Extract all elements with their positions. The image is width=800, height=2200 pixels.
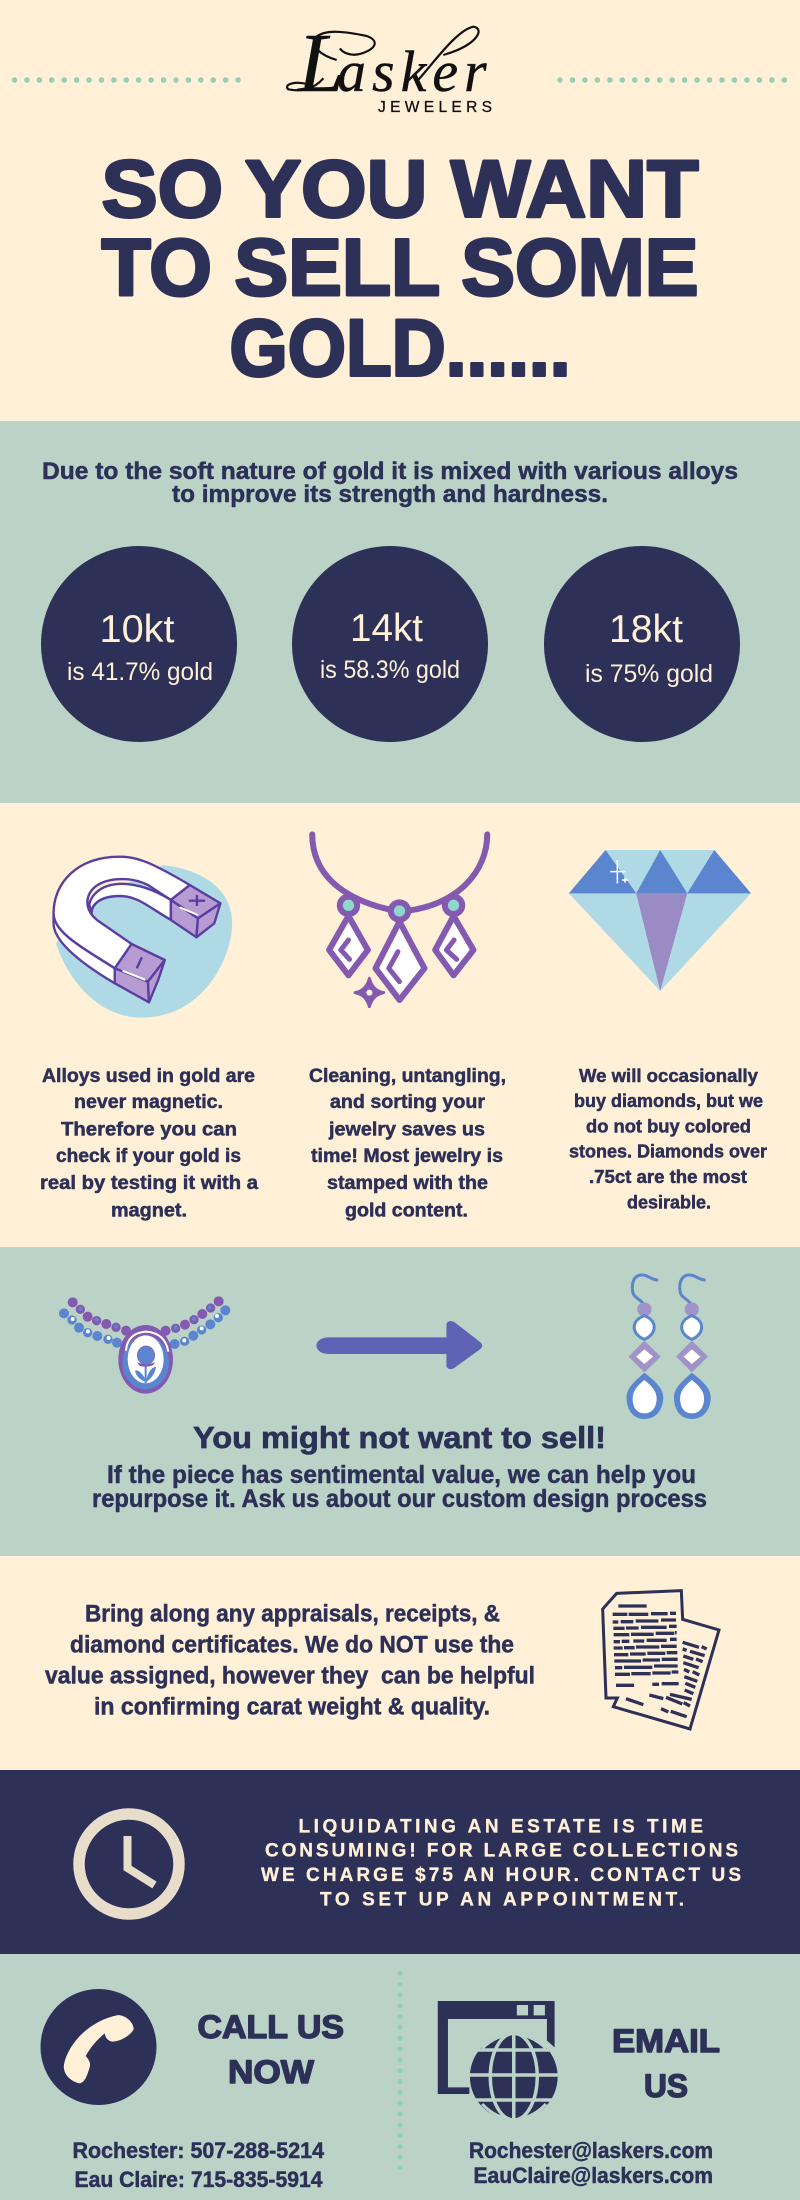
title: SO YOU WANT: [102, 144, 698, 234]
text: diamond tip: desirable.: [627, 1192, 711, 1212]
icon: necklace: [312, 834, 487, 1007]
heading: call us now: NOW: [228, 2054, 315, 2090]
text: email addresses: Rochester@laskers.com: [469, 2138, 713, 2163]
left earring: [627, 1275, 663, 1419]
text: magnet tip: real by testing it with a: [40, 1173, 258, 1194]
dotted line right: [560, 77, 786, 83]
text: magnet tip: never magnetic.: [74, 1092, 223, 1113]
heading: call us now: CALL US: [198, 2009, 344, 2045]
text: repurpose: [92, 1461, 707, 1513]
intro text: to improve its strength and hardness.: [172, 481, 608, 508]
logo: [287, 17, 493, 116]
text: appraisals: Bring along any appraisals, receipts, &: [85, 1600, 500, 1628]
text: diamond tip: buy diamonds, but we: [574, 1090, 763, 1111]
icon: clock: [79, 1814, 179, 1914]
circle: 10kt: 10kt: [100, 608, 175, 651]
text: email addresses: EauClaire@laskers.com: [474, 2163, 713, 2188]
circle: 14kt: [292, 546, 488, 742]
text: cleaning tip: Cleaning, untangling,: [309, 1066, 506, 1087]
text: cleaning tip: stamped with the: [327, 1173, 488, 1194]
title: GOLD......: [230, 304, 570, 394]
text: diamond tip: do not buy colored: [586, 1116, 751, 1136]
panel: documents: [0, 1556, 800, 1770]
heading: email us: [612, 2023, 720, 2104]
text: appraisals: in confirming carat weight & quality.: [94, 1694, 490, 1720]
dotted line left: [14, 77, 240, 83]
circle: 18kt: 18kt: [609, 608, 683, 651]
text: estate fee: TO SET UP AN APPOINTMENT.: [320, 1890, 684, 1910]
icon: web globe: [438, 2001, 559, 2120]
text: cleaning tip: jewelry saves us: [328, 1120, 485, 1140]
text: magnet tip: Alloys used in gold are: [42, 1066, 255, 1087]
title: TO SELL SOME: [102, 223, 698, 313]
icon: documents: [603, 1591, 719, 1729]
icon: diamond: [569, 850, 751, 991]
logo: JEWELERS: [378, 99, 492, 116]
panel: karat purity: [0, 421, 800, 803]
text: magnet tip: Therefore you can: [61, 1120, 237, 1140]
heading: email us: EMAIL: [612, 2023, 720, 2059]
panel: tips: [0, 803, 800, 1247]
panel: contact: [0, 1954, 800, 2200]
text: cleaning tip: gold content.: [345, 1200, 468, 1222]
text: diamond tip: .75ct are the most: [589, 1166, 747, 1187]
text: estate fee: LIQUIDATING AN ESTATE IS TIME: [298, 1816, 703, 1838]
text: estate fee: WE CHARGE $75 AN HOUR. CONTACT US: [261, 1865, 741, 1886]
circle: 10kt: [41, 546, 237, 742]
text: magnet tip: check if your gold is: [56, 1146, 241, 1167]
text: email addresses: [469, 2138, 713, 2188]
circle: 14kt: is 58.3% gold: [320, 656, 460, 684]
text: appraisals: diamond certificates. We do NOT use the: [70, 1632, 514, 1658]
icon: phone: [40, 1989, 156, 2105]
panel: repurpose: [0, 1247, 800, 1556]
icon: magnet: [54, 857, 232, 1018]
icon: earrings: [627, 1275, 711, 1419]
text: magnet tip: [40, 1066, 258, 1222]
heading: email us: US: [644, 2068, 688, 2104]
right earring: [674, 1275, 711, 1419]
text: repurpose: repurpose it. Ask us about our custom design process: [92, 1485, 707, 1513]
heading: might not want to sell: You might not want to sell!: [193, 1420, 606, 1455]
title: [102, 144, 698, 394]
heading: call us now: [198, 2009, 344, 2090]
circle: 18kt: is 75% gold: [585, 660, 713, 688]
text: phone numbers: [72, 2138, 325, 2192]
text: appraisals: value assigned, however they can be helpful: [45, 1662, 535, 1690]
text: diamond tip: stones. Diamonds over: [569, 1140, 767, 1162]
icon: pendant necklace: [59, 1296, 230, 1394]
text: appraisals: [45, 1600, 535, 1720]
text: estate fee: CONSUMING! FOR LARGE COLLECTIONS: [265, 1840, 738, 1862]
text: magnet tip: magnet.: [111, 1200, 187, 1222]
text: phone numbers: Rochester: 507-288-5214: [72, 2138, 325, 2163]
intro text: Due to the soft nature of gold it is mixed with various alloys: [42, 458, 738, 485]
text: diamond tip: [569, 1065, 767, 1212]
circle: 18kt: [544, 546, 740, 742]
text: cleaning tip: [309, 1066, 506, 1222]
panel: estate: [0, 1770, 800, 1954]
text: phone numbers: Eau Claire: 715-835-5914: [74, 2167, 323, 2192]
circle: 10kt: is 41.7% gold: [67, 658, 213, 686]
text: estate fee: [261, 1816, 741, 1910]
circle: 14kt: 14kt: [350, 607, 423, 650]
panel: header: [0, 0, 800, 421]
dotted divider: [398, 1974, 402, 2170]
logo: asker: [337, 39, 493, 104]
text: diamond tip: We will occasionally: [579, 1065, 759, 1086]
text: cleaning tip: and sorting your: [330, 1092, 486, 1113]
text: repurpose: If the piece has sentimental value, we can help you: [107, 1461, 696, 1489]
logo: L: [297, 17, 345, 110]
intro text: [42, 458, 738, 508]
text: cleaning tip: time! Most jewelry is: [311, 1146, 503, 1167]
arrow: [316, 1321, 482, 1369]
